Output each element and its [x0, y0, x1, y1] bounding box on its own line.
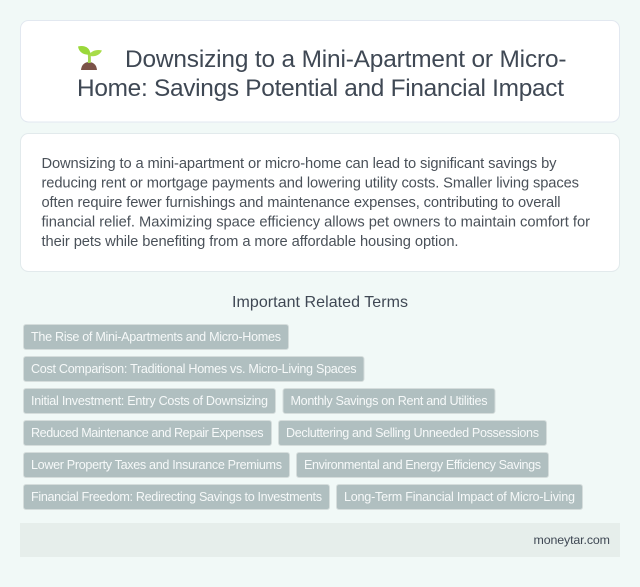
tag: environmental savings: Environmental and Energy Efficiency Savings: [304, 458, 541, 472]
tag: decluttering: [278, 420, 546, 446]
paragraph text: reducing rent or mortgage payments and lowering utility costs. Smaller living spaces: [42, 176, 579, 192]
paragraph text: [42, 156, 590, 250]
tag: monthly savings: Monthly Savings on Rent and Utilities: [290, 394, 488, 408]
title line 2: Home: Savings Potential and Financial Impact: [77, 75, 564, 102]
tag: lower taxes: Lower Property Taxes and Insurance Premiums: [31, 458, 282, 472]
tag: long-term impact: [336, 484, 582, 510]
tag: initial investment: [24, 388, 276, 414]
tag: decluttering: Decluttering and Selling Unneeded Possessions: [286, 426, 539, 440]
tag: reduced maintenance: Reduced Maintenance and Repair Expenses: [31, 426, 264, 440]
panel: title card: [20, 20, 620, 122]
title line 1: Downsizing to a Mini-Apartment or Micro-: [125, 46, 566, 73]
tag: monthly savings: [283, 388, 495, 414]
tag: long-term impact: Long-Term Financial Impact of Micro-Living: [344, 490, 575, 504]
tag: financial freedom: Financial Freedom: Redirecting Savings to Investments: [31, 490, 322, 504]
footer source text: moneytar.com: [534, 533, 610, 547]
paragraph text: often require fewer furnishings and maintenance expenses, contributing to overall: [42, 195, 560, 211]
tag: cost comparison: [24, 356, 364, 382]
icon: seedling: [78, 46, 102, 70]
tag list: [24, 324, 582, 510]
paragraph text: financial relief. Maximizing space efficiency allows pet owners to maintain comfort for: [42, 214, 590, 230]
heading: important related terms: Important Related Terms: [232, 294, 408, 311]
paragraph text: their pets while benefiting from a more affordable housing option.: [42, 234, 458, 250]
paragraph text: Downsizing to a mini-apartment or micro-home can lead to significant savings by: [42, 156, 557, 172]
tag: rise of micro-homes: The Rise of Mini-Apartments and Micro-Homes: [31, 330, 281, 344]
tag: initial investment: Initial Investment: Entry Costs of Downsizing: [31, 394, 268, 408]
tag: environmental savings: [296, 452, 548, 478]
panel: intro paragraph card: [20, 134, 620, 272]
tag: financial freedom: [24, 484, 330, 510]
footer bar: [20, 523, 620, 557]
tag: reduced maintenance: [24, 420, 272, 446]
tag: cost comparison: Cost Comparison: Traditional Homes vs. Micro-Living Spaces: [31, 362, 356, 376]
tag: lower taxes: [24, 452, 290, 478]
tag: rise of micro-homes: [24, 324, 288, 350]
